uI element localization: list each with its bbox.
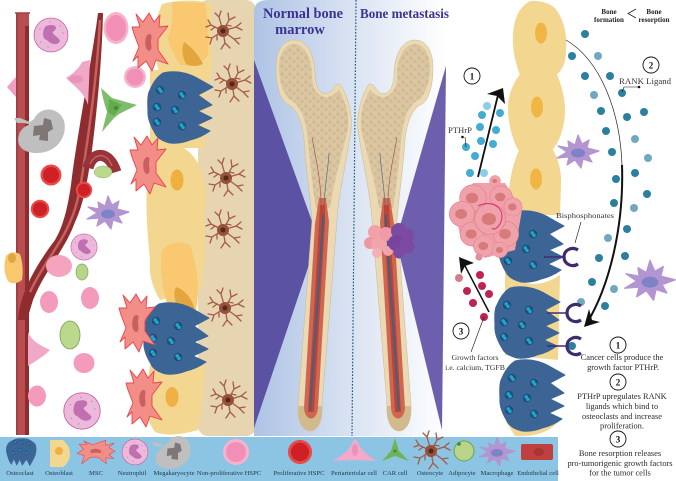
vessel: branching arteriole	[18, 13, 116, 320]
megakaryocyte	[14, 109, 65, 153]
hspc cluster	[28, 255, 99, 406]
label: bone formation vs resorption: Bone	[646, 8, 662, 16]
legend: neutrophil: Neutrophil	[118, 470, 146, 477]
step 3 explanation	[567, 431, 673, 478]
osteoblast on vessel	[4, 252, 23, 283]
osteoblast nuclei right	[530, 22, 547, 190]
neutrophil mid	[71, 234, 97, 260]
step marker 3: 3	[459, 326, 464, 336]
legend: proliferative HSPC	[273, 440, 325, 477]
legend: endothelial cell	[517, 444, 559, 477]
panel: central bone comparison	[254, 0, 450, 436]
legend: periarteriolar cell: Periarteriolar cell	[331, 470, 377, 477]
legend: megakaryocyte	[152, 436, 195, 477]
label: RANK Ligand: RANK Ligand	[619, 76, 672, 86]
label: growth factors	[445, 317, 505, 372]
legend: megakaryocyte: Megakaryocyte	[153, 470, 195, 477]
legend: osteoclast: Osteoclast	[6, 470, 34, 477]
legend: endothelial cell: Endothelial cell	[517, 470, 559, 477]
step marker 1: 1	[470, 72, 475, 82]
label: RANK Ligand	[619, 76, 672, 92]
step 1 explanation: Cancer cells produce the	[581, 353, 664, 362]
title: bone metastasis: Bone metastasis	[360, 7, 450, 22]
step 2 explanation: ligands which bind to	[586, 402, 658, 411]
label: bone formation vs resorption	[594, 8, 670, 24]
dotted divider	[352, 0, 356, 436]
adipocyte in vessel arch	[94, 166, 112, 178]
macrophage	[87, 196, 129, 229]
legend: non-proliferative HSPC	[197, 439, 262, 477]
step 1 explanation: 1	[616, 340, 621, 350]
step 1 explanation	[581, 337, 664, 372]
label: PTHrP	[448, 125, 472, 147]
periarteriolar cell lower	[28, 332, 50, 366]
label: growth factors: Growth factors	[452, 353, 498, 362]
legend: MSC: MSC	[89, 470, 104, 477]
title: normal bone marrow: marrow	[275, 22, 325, 38]
tumour mass	[449, 175, 522, 258]
zoom wedge left	[254, 60, 318, 428]
CAR cell	[101, 88, 137, 132]
legend: osteoblast	[45, 440, 73, 477]
RANK ligand dots	[568, 30, 652, 350]
label: bone formation vs resorption: formation	[594, 16, 624, 24]
step 2 explanation: 2	[616, 378, 621, 388]
vessel: main artery	[15, 13, 30, 435]
legend: osteoclast	[6, 438, 36, 477]
legend: periarteriolar cell	[331, 440, 377, 477]
step 1 explanation: growth factor PTHrP.	[587, 363, 659, 372]
step 2 explanation	[577, 374, 667, 430]
label: bone formation vs resorption: resorption	[639, 16, 670, 24]
step marker 2	[643, 57, 659, 73]
legend: CAR cell: CAR cell	[383, 470, 408, 477]
hspc top	[104, 12, 128, 44]
title: normal bone marrow: Normal bone	[263, 6, 344, 22]
panel: bone marrow niche vessels and cells	[4, 0, 251, 435]
label: bisphosphonates: Bisphosphonates	[556, 211, 614, 220]
neutrophil bottom	[64, 393, 100, 429]
legend: non-proliferative HSPC: Non-proliferative HSPC	[197, 470, 262, 477]
femur: metastatic	[358, 40, 433, 431]
proliferative hspc cells	[31, 164, 92, 218]
legend: CAR cell	[382, 438, 409, 477]
label: bone formation vs resorption: Bone	[601, 8, 617, 16]
osteocytes	[206, 11, 251, 418]
neutrophil	[34, 18, 68, 52]
step 3 explanation: pro-tumorigenic growth factors	[567, 459, 673, 468]
legend: osteocyte: Osteocyte	[417, 470, 443, 477]
legend: macrophage	[479, 438, 515, 477]
osteoclasts right	[495, 211, 565, 431]
bisphosphonate inhibitors	[544, 248, 581, 355]
step 3 explanation: 3	[616, 434, 621, 444]
label: bisphosphonates	[556, 211, 614, 243]
legend: osteocyte	[414, 431, 450, 477]
osteoblast column	[145, 0, 212, 435]
periarteriolar cell	[66, 60, 90, 105]
explanation steps	[567, 337, 673, 478]
osteoblast nuclei	[166, 42, 203, 407]
periarteriolar cell small	[7, 77, 16, 97]
step 2 explanation: osteoclasts and increase	[582, 412, 662, 421]
macrophages right	[557, 135, 675, 300]
PTHrP dots	[462, 102, 504, 177]
adipocyte	[60, 321, 80, 349]
step 2 explanation: PTHrP upregulates RANK	[577, 392, 667, 401]
zoom wedge right	[396, 66, 446, 430]
step 2 explanation: proliferation.	[600, 422, 644, 430]
legend: macrophage: Macrophage	[481, 470, 514, 477]
RANK ligand arc arrow	[566, 40, 622, 327]
adipocyte small	[76, 264, 88, 280]
legend: adipocyte: Adipocyte	[448, 470, 476, 477]
hspc	[124, 66, 146, 88]
tumour in femur	[364, 223, 414, 258]
osteoblast stack	[505, 1, 566, 436]
step marker 1	[464, 68, 480, 84]
mesenchymal stromal cells	[119, 13, 168, 427]
legend bar	[0, 431, 559, 481]
label: growth factors: i.e. calcium, TGFB	[445, 363, 505, 372]
legend: adipocyte	[448, 441, 476, 477]
panel: metastasis mechanism	[445, 1, 675, 478]
step marker 3	[453, 323, 469, 339]
osteoclasts	[144, 72, 213, 374]
legend: osteoblast: Osteoblast	[45, 470, 73, 477]
step marker 2: 2	[649, 60, 654, 70]
arrow 1	[478, 88, 505, 177]
label: PTHrP: PTHrP	[448, 125, 472, 135]
hspc inner top	[106, 15, 126, 41]
legend: neutrophil	[118, 439, 148, 477]
legend: proliferative HSPC: Proliferative HSPC	[273, 470, 325, 477]
step 3 explanation: for the tumor cells	[589, 468, 651, 478]
background band: osteocyte niche	[198, 0, 256, 436]
periarteriolar nucleus	[69, 75, 83, 83]
growth factor dots	[455, 253, 493, 321]
femur: normal	[276, 40, 351, 431]
legend: MSC	[77, 440, 115, 477]
arrow 3	[459, 257, 489, 312]
step 3 explanation: Bone resorption releases	[579, 449, 661, 458]
